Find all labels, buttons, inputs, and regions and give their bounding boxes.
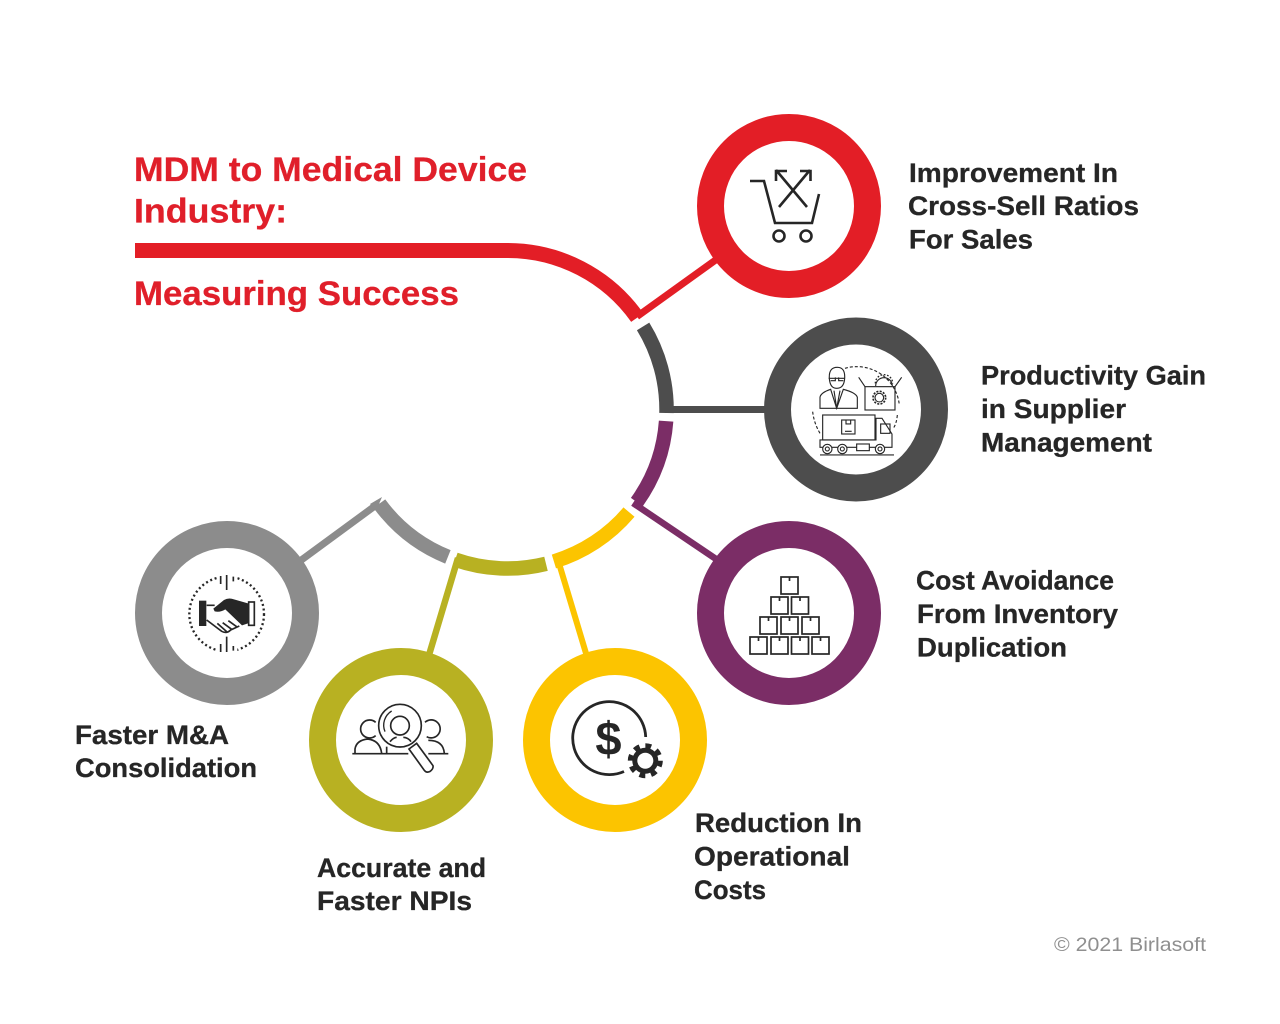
label: Duplication [917,632,1067,662]
dark grey ring [778,331,934,488]
label [694,808,862,905]
panel: supplier productivity [778,331,1206,488]
yellow ring [536,662,694,818]
label: Consolidation [75,753,257,783]
light grey arc and connector [300,497,448,561]
light grey ring [148,534,306,692]
icon: dollar and gear: $ [595,712,622,765]
panel: inventory duplication [710,534,1118,692]
label: Reduction In [695,808,862,838]
label [317,853,486,916]
olive ring [322,662,480,818]
panel: cross-sell ratios [710,128,1139,284]
label: in Supplier [981,394,1126,424]
copyright: © 2021 Birlasoft [1054,934,1207,956]
panel: M&A consolidation [75,534,306,783]
label: Operational [694,842,850,872]
label [916,566,1118,662]
dark grey arc and connector [643,326,770,413]
subtitle: Measuring Success [134,275,459,313]
title: MDM to Medical Device [134,151,527,189]
icon: magnifier over people [352,704,448,772]
title [134,151,527,230]
olive arc and connector [429,558,546,655]
label [75,720,257,783]
icon: dollar and gear [573,702,660,775]
label [908,158,1139,254]
label: Costs [694,875,766,905]
label: Faster NPIs [317,886,472,916]
purple arc and connector [633,421,716,559]
label: Faster M&A [75,720,229,750]
label: Improvement In [909,158,1118,188]
label: Management [981,428,1152,458]
panel: operational costs [536,662,862,905]
icon: manager, box and truck [813,367,902,455]
yellow arc and connector [554,512,629,655]
icon: cart with crossing arrows [750,170,819,242]
purple ring [710,534,868,692]
label: Cost Avoidance [916,566,1114,596]
label: Cross-Sell Ratios [908,191,1139,221]
label: For Sales [909,224,1033,254]
title: Industry: [134,192,287,230]
icon: pyramid of boxes [750,577,829,654]
panel: new product introductions [317,662,486,916]
red ring [710,128,868,284]
label: From Inventory [917,599,1118,629]
label: Productivity Gain [981,360,1206,390]
label: Accurate and [317,853,486,883]
label [981,360,1206,458]
icon: handshake [189,573,264,653]
red arc and connector [135,250,717,318]
